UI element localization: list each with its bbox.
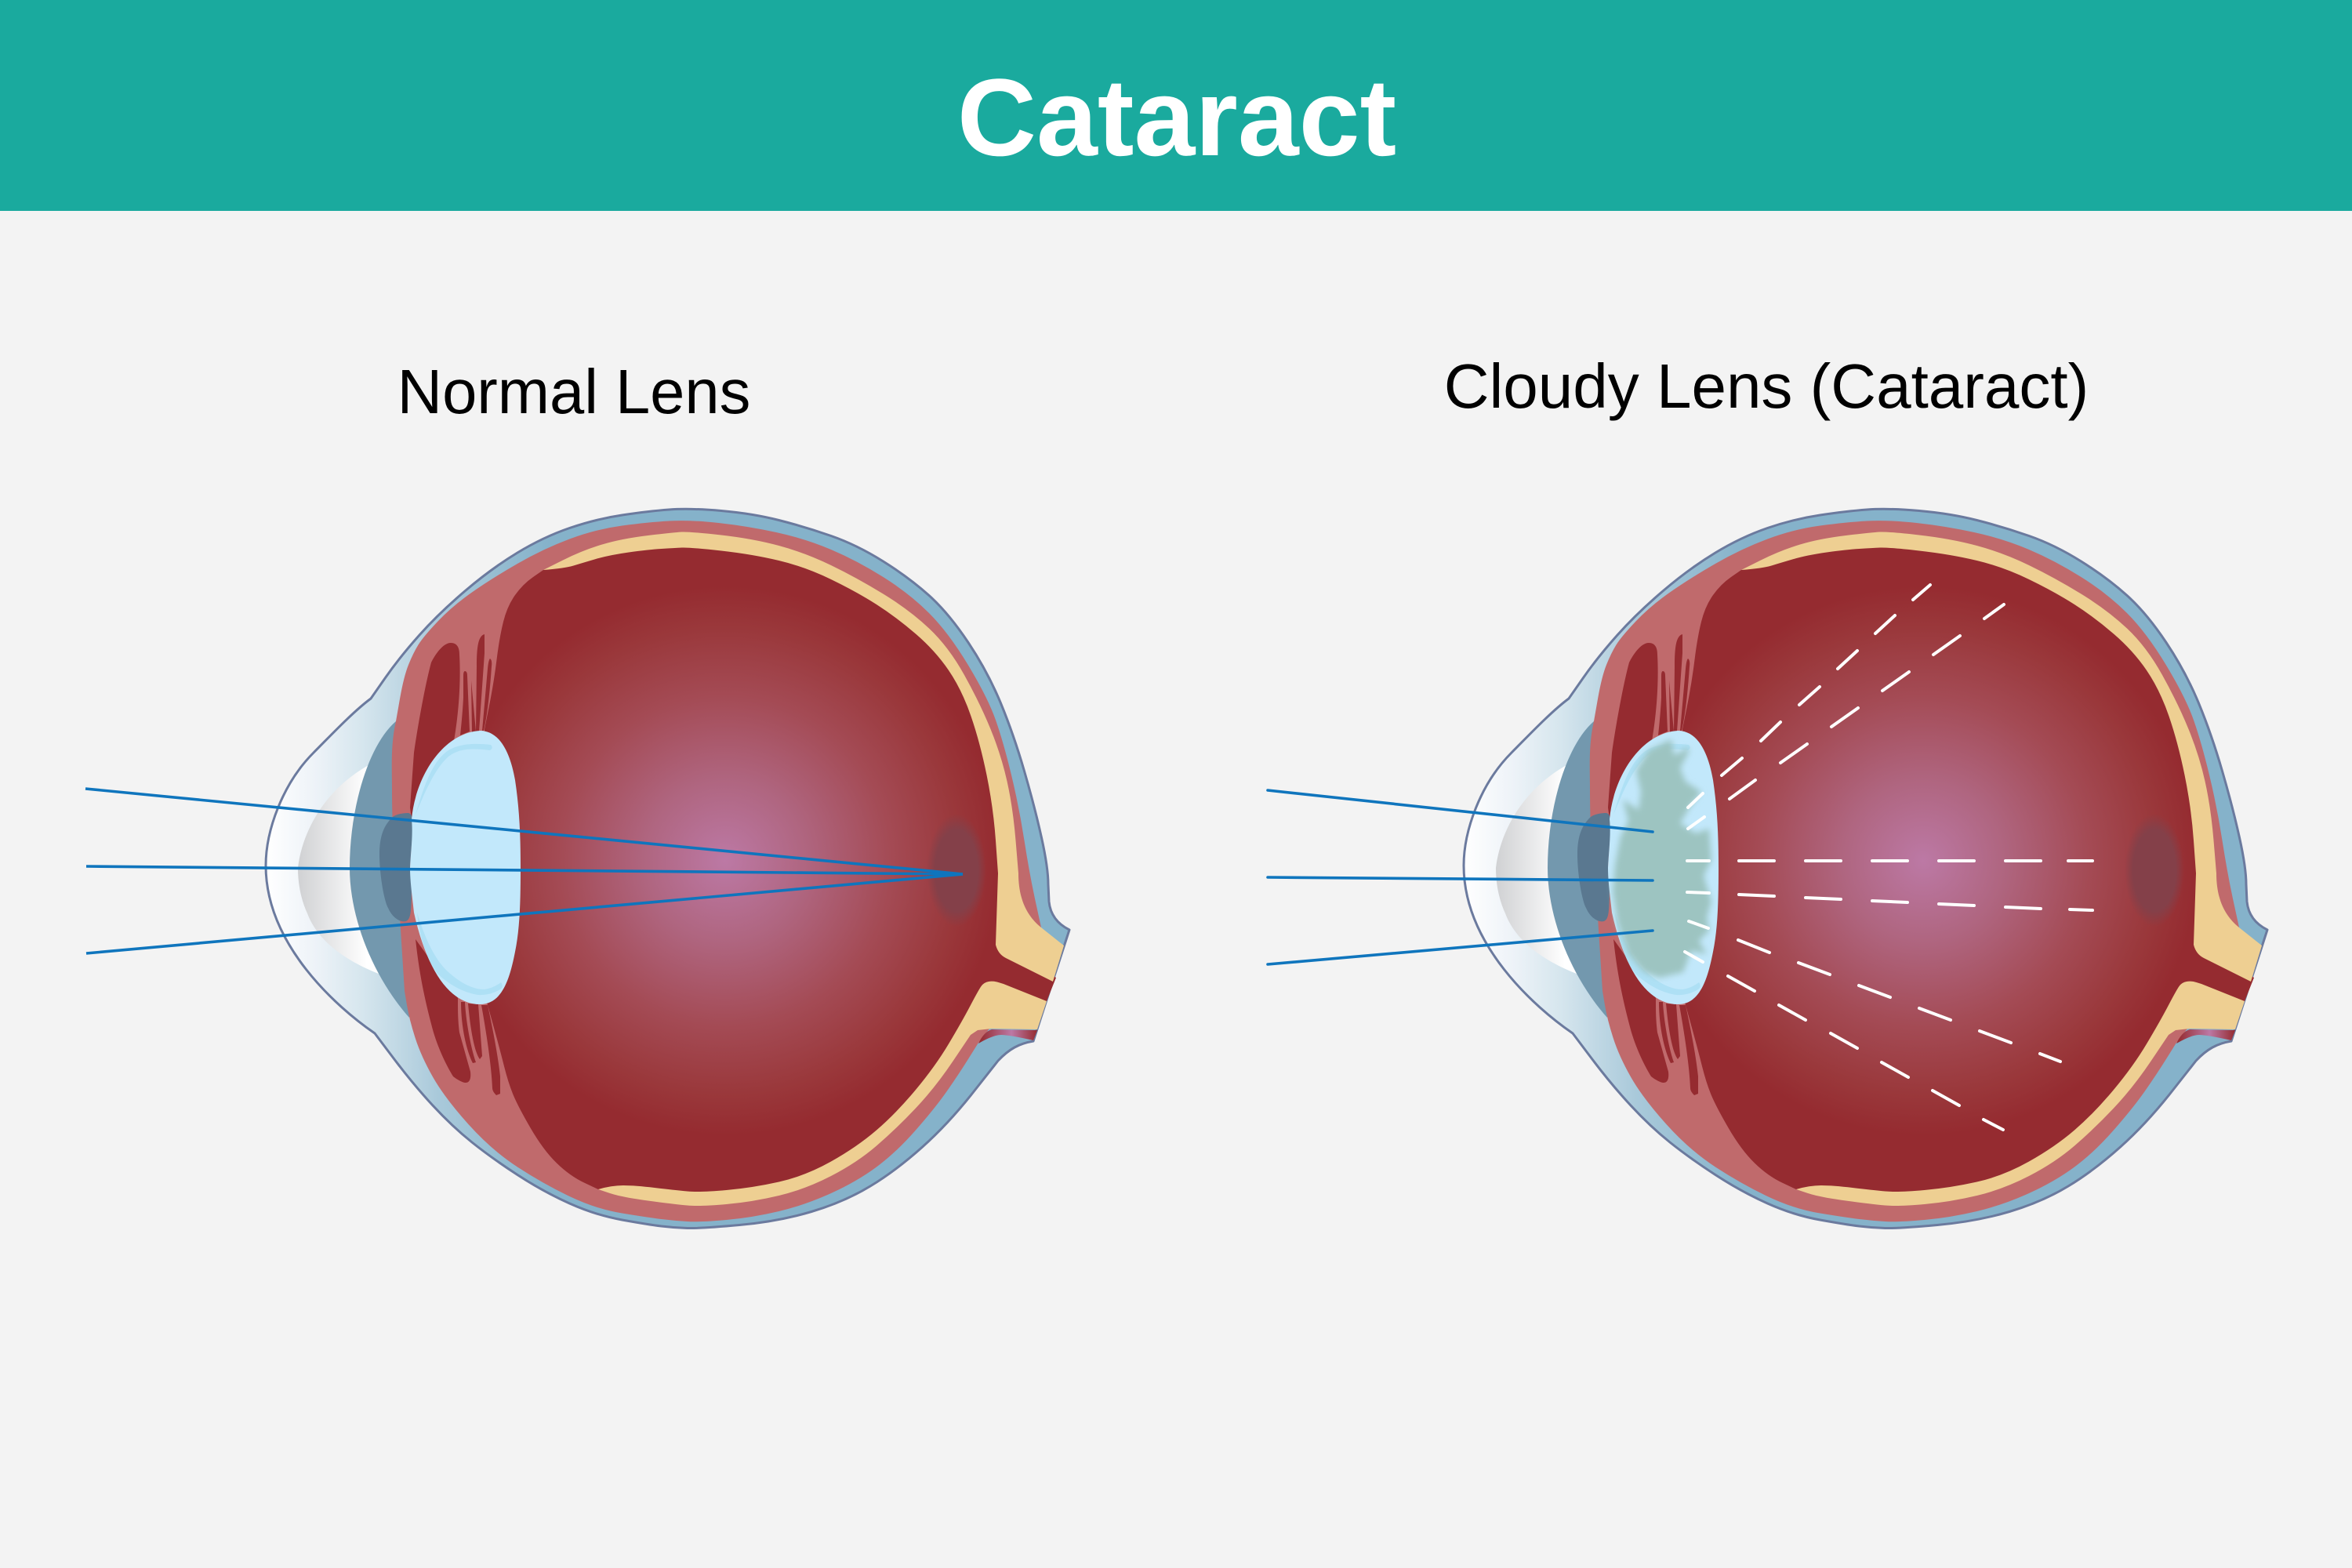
scattered light dashes bbox=[1685, 585, 2092, 1130]
heading: cloudy lens: Cloudy Lens (Cataract) bbox=[1444, 351, 2089, 421]
optic nerve sliver bbox=[2176, 1029, 2235, 1044]
choroid layer bbox=[1590, 521, 2239, 1221]
optic nerve sliver bbox=[978, 1029, 1037, 1044]
retina upper bbox=[543, 532, 1064, 982]
sclera outer shell bbox=[266, 509, 1069, 1229]
sclera outer shell bbox=[1464, 509, 2267, 1229]
clear lens bbox=[410, 731, 521, 1004]
lens highlights bbox=[416, 744, 503, 995]
ciliary body upper bbox=[410, 643, 460, 819]
zonule fibres bbox=[460, 634, 500, 1095]
ciliary body lower bbox=[1613, 939, 1668, 1083]
macula spot bbox=[2125, 814, 2184, 927]
light rays focused on the retina bbox=[85, 789, 963, 953]
title banner: Cataract bbox=[957, 56, 1396, 179]
lens bbox=[1608, 731, 1719, 1004]
pupil shadow bbox=[379, 813, 412, 921]
zonule fibres bbox=[1658, 634, 1698, 1095]
macula spot bbox=[927, 814, 986, 927]
vitreous body bbox=[485, 539, 1056, 1198]
choroid layer bbox=[392, 521, 1041, 1221]
ciliary body lower bbox=[416, 939, 470, 1083]
vitreous body bbox=[1682, 539, 2254, 1198]
lens highlights bbox=[1613, 744, 1700, 995]
eye diagram: cloudy lens bbox=[1268, 509, 2267, 1229]
retina upper bbox=[1741, 532, 2262, 982]
ciliary body upper bbox=[1608, 643, 1658, 819]
anterior chamber bbox=[298, 765, 392, 980]
anterior chamber bbox=[1496, 765, 1590, 980]
eye diagram: normal lens bbox=[85, 509, 1069, 1229]
title banner bbox=[0, 0, 2352, 211]
retina lower bbox=[598, 982, 1047, 1206]
iris bbox=[350, 721, 423, 1018]
pupil shadow bbox=[1577, 813, 1610, 921]
cataract cloud bbox=[1613, 739, 1711, 978]
light rays stopping at the lens bbox=[1268, 790, 1653, 964]
iris bbox=[1548, 721, 1621, 1018]
heading: normal lens: Normal Lens bbox=[397, 357, 750, 426]
retina lower bbox=[1796, 982, 2245, 1206]
